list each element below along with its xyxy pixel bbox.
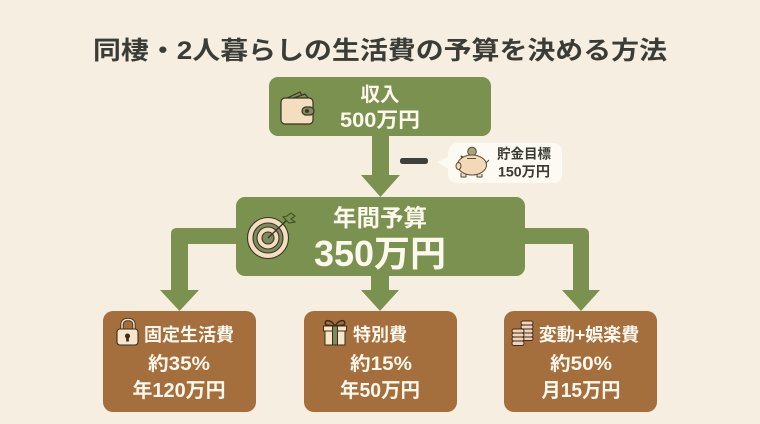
arrow: budget to special costs <box>361 274 399 311</box>
savings text <box>497 146 551 180</box>
income text: 収入 <box>360 84 400 106</box>
panel: fixed costs <box>103 311 256 412</box>
variable costs text <box>539 325 639 402</box>
icon: target <box>248 213 295 258</box>
panel: annual budget <box>236 197 525 276</box>
arrow: budget to fixed costs <box>160 228 240 311</box>
special costs text: 年50万円 <box>340 379 420 402</box>
budget text: 年間予算 <box>333 205 427 231</box>
title: 同棲・2人暮らしの生活費の予算を決める方法 <box>93 37 667 65</box>
arrow: budget to variable costs <box>520 228 600 311</box>
income text: 500万円 <box>340 109 420 132</box>
fixed costs text: 年120万円 <box>132 379 226 402</box>
icon: piggy bank <box>456 147 489 177</box>
icon: padlock <box>117 320 138 345</box>
panel: variable and entertainment costs <box>504 311 657 412</box>
icon: coin stacks <box>512 321 533 346</box>
arrow: income to annual budget <box>361 134 400 197</box>
fixed costs text: 固定生活費 <box>144 325 234 345</box>
savings text: 150万円 <box>498 164 550 180</box>
callout: savings goal <box>438 143 562 183</box>
icon: wallet <box>281 92 314 124</box>
variable costs text: 約50% <box>550 353 612 375</box>
panel: income <box>269 77 491 136</box>
variable costs text: 変動+娯楽費 <box>539 325 639 345</box>
savings text: 貯金目標 <box>497 146 551 162</box>
budget text <box>314 205 446 274</box>
panel: special costs <box>304 311 457 412</box>
income text <box>340 84 420 132</box>
fixed costs text <box>132 325 234 402</box>
special costs text <box>340 325 420 402</box>
variable costs text: 月15万円 <box>542 380 620 402</box>
fixed costs text: 約35% <box>148 353 210 375</box>
icon: gift box <box>324 321 346 345</box>
minus sign <box>400 158 428 164</box>
special costs text: 特別費 <box>353 325 407 345</box>
budget text: 350万円 <box>314 233 446 274</box>
special costs text: 約15% <box>350 353 412 375</box>
